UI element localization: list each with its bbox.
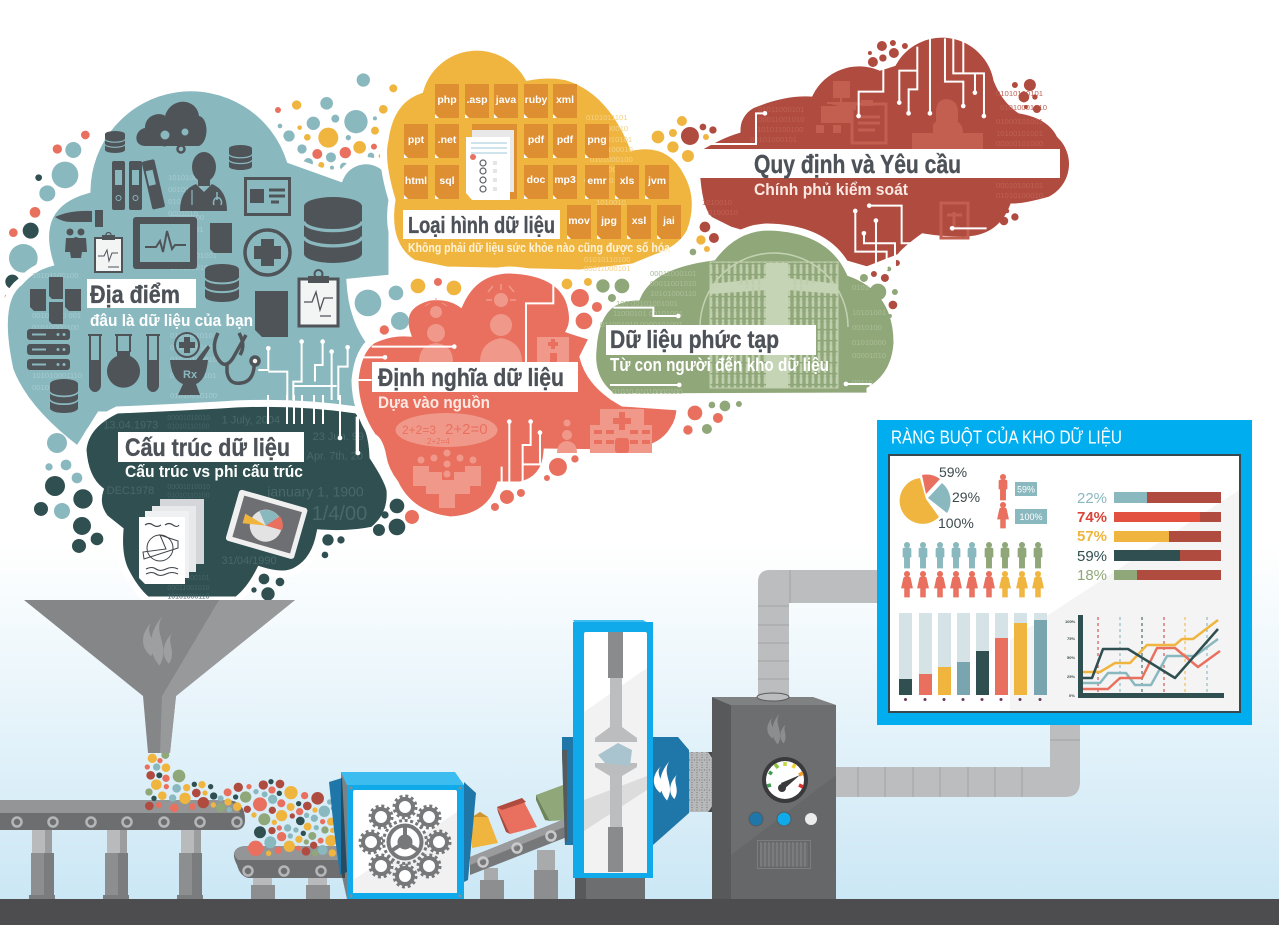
icon: large database xyxy=(304,197,362,263)
icon: tablet with pie chart xyxy=(225,489,308,560)
icon: test tubes and flask xyxy=(88,335,160,391)
icon: document xyxy=(210,223,232,253)
file icons: png xyxy=(587,134,607,146)
icon: lower database xyxy=(50,379,78,413)
file icons: sql xyxy=(439,175,455,187)
icon: mortar and pestle xyxy=(170,345,210,395)
binary texture: 1010010 xyxy=(596,198,626,207)
block: yellow xyxy=(472,812,498,848)
icon: binders xyxy=(112,159,165,210)
binary texture: 100 00101001001 xyxy=(616,299,678,308)
panel: data types cloud xyxy=(384,47,695,273)
binary texture: 01010 01010000100 xyxy=(612,387,683,396)
binary texture: 01010100101 xyxy=(996,89,1043,98)
icon: thinking doctor small xyxy=(419,298,453,362)
gender statistics xyxy=(998,474,1047,528)
date texture: 31/04/1990 xyxy=(222,555,277,567)
panel: data warehouse constraints screen xyxy=(877,420,1252,725)
binary texture xyxy=(32,173,217,400)
panel: complex data cloud xyxy=(593,227,897,397)
icon: small database xyxy=(105,131,125,153)
date texture: 00011001010 xyxy=(167,585,210,592)
pie labels: 29% xyxy=(952,489,980,505)
colored dots around clouds xyxy=(34,40,1041,601)
funnel xyxy=(24,600,295,753)
binary texture: 10101000 xyxy=(168,173,202,182)
binary texture xyxy=(600,269,886,396)
binary texture: 01010010100 xyxy=(170,391,217,400)
text block: data structure: Cấu trúc vs phi cấu trúc xyxy=(125,462,303,481)
binary texture: 01000101001 xyxy=(996,117,1043,126)
vent grille xyxy=(758,840,810,868)
icon: doctor xyxy=(180,152,227,211)
file icons: jai xyxy=(662,215,675,227)
date texture: 13.04.1973 xyxy=(103,419,158,431)
icon: cloud with gears xyxy=(136,102,206,152)
gender statistics: 59% xyxy=(1017,484,1035,494)
icon: gears xyxy=(360,796,450,887)
line chart: 0% xyxy=(1069,693,1075,698)
text block: regulation: Chính phủ kiểm soát xyxy=(754,181,908,199)
block under press xyxy=(598,743,632,766)
horizontal percentage bars xyxy=(1077,490,1221,584)
binary texture: 11000101 xyxy=(170,225,204,234)
binary texture: 11000101 00101001 xyxy=(613,309,683,318)
pictogram: people xyxy=(902,542,1044,597)
horizontal percentage bars: 74% xyxy=(1077,509,1107,526)
binary texture: 01010000100 xyxy=(32,323,79,332)
binary texture: 00001010 xyxy=(852,351,886,360)
gauge xyxy=(762,757,808,803)
file icons: mp3 xyxy=(554,174,576,186)
text block: location: đâu là dữ liệu của bạn xyxy=(90,311,253,330)
binary texture: 01010100010 xyxy=(170,355,217,364)
pie labels: 100% xyxy=(938,515,974,531)
date texture: 10101000110 xyxy=(167,593,210,600)
date texture xyxy=(103,414,367,600)
text block: regulation xyxy=(696,149,1060,199)
column chart xyxy=(899,613,1047,701)
binary texture: 01010000 xyxy=(852,338,886,347)
file icons: doc xyxy=(527,174,545,186)
file icons: ppt xyxy=(408,134,425,146)
binary texture: 0001010 xyxy=(168,209,198,218)
binary texture xyxy=(702,89,1047,217)
inclined conveyor with blocks xyxy=(470,785,567,899)
text block: data types: Không phải dữ liệu sức khỏe nào cũng được số hóa xyxy=(408,241,671,255)
line chart xyxy=(1065,615,1224,698)
horizontal percentage bars: 59% xyxy=(1077,548,1107,565)
icon: hand protecting family xyxy=(55,210,103,258)
text block: data definition: Dựa vào nguồn xyxy=(378,394,490,412)
file icons: php xyxy=(437,94,457,106)
text block: data structure xyxy=(118,432,304,481)
icon: Vitruvian figure from people xyxy=(700,253,848,388)
control box xyxy=(712,693,836,899)
icon: medical cross circle xyxy=(245,230,290,275)
file icons: .asp xyxy=(466,94,488,106)
icon: white flame xyxy=(654,762,677,800)
date texture: 00001010010 xyxy=(167,415,210,422)
binary texture: 10100101001 xyxy=(996,129,1043,138)
block: red xyxy=(497,798,537,834)
binary texture: 0100010 xyxy=(708,208,738,217)
icon: monitor with pulse xyxy=(133,217,197,269)
binary texture: 10101001 xyxy=(852,308,886,317)
circuit lines xyxy=(258,38,987,485)
icon: clipboard xyxy=(852,100,886,143)
screen inner xyxy=(889,455,1240,712)
file icons: pdf xyxy=(528,134,545,146)
icon: card xyxy=(246,178,290,214)
icon: four documents xyxy=(30,277,81,324)
file icons: xls xyxy=(620,175,634,187)
pipe from press to screen xyxy=(758,570,1080,797)
icon: large clipboard xyxy=(299,270,338,326)
binary texture: 10101100100 xyxy=(757,125,803,134)
binary texture: 100 xyxy=(604,165,617,174)
pie labels: 59% xyxy=(939,464,967,480)
line chart: 75% xyxy=(1067,636,1075,641)
text block: complex data: Từ con người đến kho dữ liệu xyxy=(610,355,829,375)
binary texture: 00000101000 xyxy=(996,139,1043,148)
factory floor xyxy=(0,899,1279,925)
binary texture: 00101010 001 xyxy=(32,311,81,320)
date texture: 01010110100 xyxy=(167,492,210,499)
binary texture xyxy=(584,113,633,273)
text block: location: Địa điểm xyxy=(90,281,180,309)
line chart: 100% xyxy=(1065,619,1076,624)
date texture: 00011000101 xyxy=(167,575,210,582)
date texture: 1 July, 2004 xyxy=(222,414,280,426)
gear machine xyxy=(329,772,476,899)
binary texture: 01010110100 xyxy=(584,255,630,264)
binary texture: 0101 xyxy=(852,283,869,292)
icon: small clipboard xyxy=(95,232,122,272)
mesh connector xyxy=(689,752,726,812)
binary texture: 00101000 xyxy=(168,185,202,194)
binary texture: 10101100100 xyxy=(32,271,78,280)
binary texture: 000101010 xyxy=(170,263,208,272)
icon: people with math bubble: 2+2=0 xyxy=(445,421,488,438)
file icons: html xyxy=(405,175,427,187)
text block: location xyxy=(87,279,253,330)
icon: people with math bubble: 2+2=3 xyxy=(402,423,436,437)
file icons xyxy=(404,84,681,239)
binary texture: 00011000101 xyxy=(170,371,216,380)
icon: law book xyxy=(941,203,968,238)
file icons: jpg xyxy=(600,215,617,227)
panel: regulation cloud xyxy=(695,34,1072,270)
date texture: 23 Jun. 99 xyxy=(313,431,364,443)
icon: funnel flame logo xyxy=(143,616,172,666)
binary texture: 0101011101 xyxy=(586,113,628,122)
horizontal percentage bars: 57% xyxy=(1077,528,1107,545)
icon: box flame logo xyxy=(767,713,786,745)
binary texture: 01010100010 xyxy=(996,191,1043,200)
text block: complex data xyxy=(606,325,829,375)
panel: data structure cloud xyxy=(83,403,390,600)
text block: regulation: Quy định và Yêu cầu xyxy=(754,149,961,179)
horizontal percentage bars: 22% xyxy=(1077,490,1107,507)
block: green xyxy=(536,785,567,821)
file icons: xml xyxy=(556,94,574,106)
icon: org chart xyxy=(816,81,855,133)
binary texture: 0001100010 xyxy=(586,124,628,133)
date texture: 1/4/00 xyxy=(312,503,367,525)
date texture: 01010110100 xyxy=(167,423,210,430)
icon: thinking doctor large xyxy=(480,284,522,362)
binary texture: 011001010 0000101001 xyxy=(600,320,683,329)
circuit end dots xyxy=(266,90,986,455)
binary texture: 00101001001 xyxy=(170,343,217,352)
conveyor two xyxy=(234,846,345,899)
binary texture: 101010001110 xyxy=(32,371,82,380)
text block: data definition xyxy=(372,362,578,412)
file icons: mov xyxy=(568,215,590,227)
binary texture: 00011001010 xyxy=(758,115,804,124)
date texture: january 1, 1900 xyxy=(266,484,364,500)
icon: capitol building xyxy=(912,99,983,149)
text block: data types: Loại hình dữ liệu xyxy=(408,212,555,238)
file icons: pdf xyxy=(557,134,574,146)
icon: server rack xyxy=(27,329,70,370)
text block: data structure: Cấu trúc dữ liệu xyxy=(125,434,290,462)
binary texture: 00011001010 xyxy=(650,279,696,288)
icon: mortar and pestle: Rx xyxy=(183,369,198,381)
icon: hospital small xyxy=(537,337,569,362)
icon: small medical cross xyxy=(175,333,199,357)
binary texture: 0010100 xyxy=(852,323,882,332)
binary texture: 001010 xyxy=(32,383,58,392)
icon: small thinking doctor xyxy=(557,420,577,453)
icon: database xyxy=(229,145,252,170)
file icons: jvm xyxy=(647,175,666,187)
file icons: .net xyxy=(438,134,457,146)
binary texture: 0101000100 xyxy=(590,155,633,164)
binary texture: 00101001001 xyxy=(170,251,217,260)
file icons: ruby xyxy=(525,94,548,106)
text block: data types xyxy=(403,210,671,255)
icon: form document xyxy=(466,130,514,200)
binary texture: 01011000101 xyxy=(758,105,804,114)
binary texture: 00010100101 xyxy=(996,181,1043,190)
binary texture: 00101000101 xyxy=(750,135,797,144)
binary texture: 01010100 xyxy=(170,213,204,222)
file icons: emr xyxy=(587,175,607,187)
press machine xyxy=(562,620,689,899)
icon: people with math bubble: 2+2=4 xyxy=(427,437,450,446)
dots around teal cloud xyxy=(5,73,397,299)
panel: data definition cloud xyxy=(355,270,680,520)
text block: data definition: Định nghĩa dữ liệu xyxy=(378,364,564,392)
pie labels xyxy=(938,464,980,531)
date texture: 00001010010 xyxy=(167,484,210,491)
binary texture: 01010100 xyxy=(168,197,202,206)
icon: people with math bubble xyxy=(396,413,498,508)
buttons xyxy=(749,812,817,826)
line chart: 50% xyxy=(1067,655,1075,660)
binary texture: 00011000101 xyxy=(584,264,630,273)
binary texture: 0101001010 xyxy=(170,331,213,340)
binary texture: 1010010 xyxy=(702,198,732,207)
binary texture: 10101000110 xyxy=(650,289,696,298)
pie chart xyxy=(900,475,950,524)
line chart: 25% xyxy=(1067,674,1075,679)
conveyor one xyxy=(0,800,245,899)
text block: complex data: Dữ liệu phức tạp xyxy=(610,326,779,354)
panel: location cloud xyxy=(4,88,394,450)
icon: paper stack xyxy=(139,499,204,584)
date texture: Apr. 7th, 20 xyxy=(307,450,363,462)
icon: middle database xyxy=(205,264,239,302)
file icons: java xyxy=(495,94,516,106)
screen heading: RÀNG BUỘT CỦA KHO DỮ LIỆU xyxy=(891,426,1122,448)
horizontal percentage bars: 18% xyxy=(1077,567,1107,584)
icon: stethoscope xyxy=(214,333,259,383)
gender statistics: 100% xyxy=(1019,512,1043,522)
binary texture: 1101010101 xyxy=(590,135,632,144)
icon: large hospital xyxy=(590,409,652,453)
binary texture: 00110 xyxy=(852,378,873,387)
date texture: DEC1978 xyxy=(107,485,154,497)
binary texture: 00011000101 xyxy=(650,269,696,278)
binary texture: 01010001010 xyxy=(1000,103,1047,112)
file icons: xsl xyxy=(632,215,646,227)
binary texture: 00110001 xyxy=(584,176,618,185)
binary texture: 1010100010 xyxy=(590,145,633,154)
data particles stream xyxy=(145,751,338,857)
icon: large document xyxy=(255,291,288,337)
